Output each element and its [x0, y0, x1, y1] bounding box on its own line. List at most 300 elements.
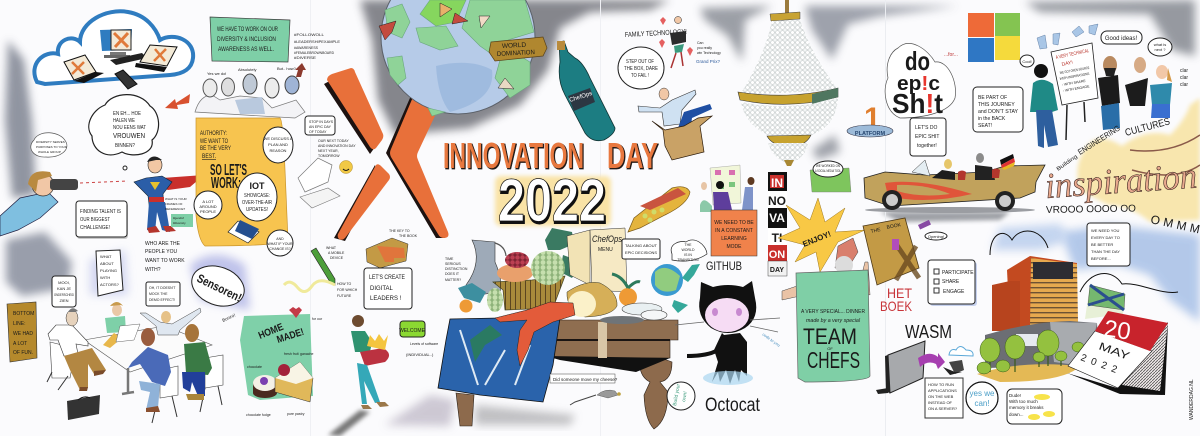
checklist box: PARTICIPATE: [942, 270, 974, 276]
title: innovation day: DAY: [608, 136, 659, 177]
flag: [1085, 284, 1125, 319]
callout: plan bubble: PLAN AND: [268, 142, 288, 147]
family technology: Grand Prix?: [696, 59, 721, 64]
do epic shit bubble: [885, 43, 958, 119]
binocular man: [0, 171, 128, 236]
the book: [863, 218, 947, 285]
octocat: [675, 281, 781, 385]
icon: keyboard: [110, 53, 147, 65]
speech bubbles: clar: [1180, 82, 1188, 88]
superman: REFERENCE?: [165, 207, 186, 211]
icon: monitor: [100, 29, 132, 58]
note: social media tool: [810, 161, 851, 192]
do epic shit bubble: do: [905, 46, 930, 76]
speech: sensoren: [186, 259, 250, 313]
speech: small right of panel: STOP IN DAYS: [309, 120, 334, 124]
family technology: win Technology: [697, 51, 721, 55]
person: left man: [48, 308, 106, 391]
hashtag list: #LEADERSHIPEXAMPLE: [294, 39, 340, 44]
note: sketches and smiley: OUR NEXT TODAY: [318, 139, 349, 143]
icon: german flag: [1000, 154, 1015, 170]
bread: [567, 282, 617, 317]
label: het boek: [880, 285, 913, 314]
text: time: DOES IT: [445, 272, 460, 276]
X logo: [324, 51, 464, 241]
man jumping from box: [638, 88, 712, 160]
small cloud: DIVERSITY SERVES: [36, 140, 65, 144]
speech: we need you: BE BETTER: [1091, 242, 1113, 247]
speech: finding talent: CHALLENGE!: [80, 225, 110, 231]
sticky board team: [700, 165, 754, 212]
chair: [152, 366, 178, 423]
speech: it doesn't work: OH, IT DOESN'T: [149, 286, 176, 290]
speech: digital leaders: LEADERS !: [370, 296, 402, 302]
note: diversity: AWARENESS AS WELL.: [218, 47, 274, 53]
speech: playing with actors: PLAYING: [100, 268, 117, 273]
panel: home made: chocolate fudge: [246, 413, 271, 417]
callout: small bubble: CHANGE IS?: [269, 247, 291, 251]
herbs: [470, 325, 502, 362]
note: how to run: INSTEAD OF: [928, 400, 953, 405]
signature: WANDERDAG.NL: [1189, 379, 1195, 420]
table legs: [456, 358, 672, 429]
note: social media tool: WE WORKED ON: [816, 163, 840, 168]
calendar: [1067, 311, 1168, 395]
speech: we need you: [1087, 223, 1130, 266]
the book: THE: [870, 227, 882, 235]
person: man green shirt: [182, 324, 212, 400]
speech: we need you: EVERY DAY TO: [1091, 235, 1120, 240]
innovation blocks: [768, 172, 787, 276]
speech: dude: [1007, 389, 1062, 424]
fruit: small orange: [460, 300, 472, 312]
map: land: [385, 0, 534, 116]
icon: flags: [379, 3, 514, 89]
panel: home made: chocolate: [247, 365, 262, 369]
innovation blocks: VA: [769, 211, 785, 225]
inspiration cloud and lettering: ENGINEERING: [1076, 124, 1122, 157]
icon: right laptop: [135, 45, 177, 72]
speech: digital leaders: LET'S CREATE: [369, 275, 405, 281]
label: het boek: HET: [887, 285, 912, 301]
innovation blocks: NO: [768, 194, 786, 208]
icon: server: [876, 341, 925, 394]
note: how to run: [925, 378, 963, 418]
speech bubbles: Good ideas!: [1105, 36, 1138, 42]
note: bottom line: LINE:: [13, 321, 26, 327]
speech: be part of this journey: THIS JOURNEY: [978, 102, 1015, 108]
callout: IoT bubble: SHOWCASE:: [244, 193, 270, 199]
speech: step out of the box: THE BOX, DARE: [624, 66, 659, 72]
callout: people bubble: AROUND: [199, 204, 217, 209]
callout: people bubble: A LOT: [202, 199, 214, 204]
speech: playing with actors: ABOUT: [100, 261, 114, 266]
driver: [932, 159, 966, 180]
person: man blue shirt: [128, 328, 171, 412]
speech bubbles: what is: [1154, 42, 1166, 47]
building: [977, 231, 1178, 382]
speech: be part of this journey: in the BACK: [978, 116, 1006, 122]
person: bearded: [1098, 56, 1120, 130]
icon: briefcase: [67, 395, 100, 420]
hashtag list: #FOLLOWOLL: [294, 32, 325, 37]
plate: world domination: [489, 37, 547, 61]
small cloud: [31, 133, 68, 157]
chef figure and starburst: [778, 198, 870, 300]
chair: [47, 342, 76, 390]
trees: [977, 330, 1084, 374]
whiteboard: - WITH ENGAGE: [1062, 84, 1090, 93]
panel: home made: ganache: [300, 352, 313, 356]
icon: phone: [115, 70, 137, 89]
checklist box: [928, 260, 977, 306]
passenger: [975, 153, 1000, 180]
panel: team of chefs: made by a very special: [806, 318, 861, 324]
hashtag list: #DIVERSE: [294, 55, 316, 60]
panel: team of chefs: OF: [827, 346, 833, 351]
calendar: 2022: [1079, 352, 1119, 376]
family technology: you really: [697, 46, 712, 50]
five portraits: Yes we do!: [207, 71, 226, 76]
speech: let's do epic shit: together!: [917, 143, 937, 149]
speech bubbles: clar: [1180, 68, 1188, 74]
table: [84, 326, 212, 372]
note: how to run: ON THE WEB: [928, 394, 954, 399]
speech: step out of the box: STEP OUT OF: [626, 59, 654, 65]
person with crown: [328, 315, 389, 436]
thought cloud: NOU EENS WAT: [113, 125, 146, 131]
platform 1: [847, 102, 893, 137]
speech: let's do epic shit: LET'S DO: [915, 125, 937, 131]
team at whiteboard: [1020, 24, 1188, 148]
cake: slice: [275, 362, 313, 402]
car with drivers: [864, 153, 1045, 213]
superman: [134, 156, 204, 233]
panel: yellow authority: WE WANT TO: [200, 139, 228, 145]
small cloud: WHOLE GROUP: [38, 150, 61, 154]
green device: [399, 321, 438, 357]
speech: be part of this journey: and DON'T STAY: [978, 109, 1019, 115]
speech: be part of this journey: [973, 87, 1023, 132]
note: constant learning mode: WE NEED TO BE: [714, 220, 754, 226]
note: constant learning mode: IN A CONSTANT: [715, 228, 753, 234]
speech: mooi: [52, 276, 76, 307]
callout: people bubble: [194, 191, 222, 219]
note: sketches and smiley: NEXT YEAR,: [318, 149, 339, 153]
note: bottom line: WE HAD: [13, 331, 33, 337]
panel: yellow authority: BEST.: [202, 154, 216, 160]
text: who are the people: WHO ARE THE: [145, 241, 181, 247]
checklist box: SHARE: [942, 279, 960, 285]
chef figure and starburst: THERE IS ONE: [810, 283, 839, 288]
panel: yellow authority: AUTHORITY:: [200, 131, 227, 137]
plate: world domination: DOMINATION: [497, 49, 535, 58]
innovation blocks: DAY: [770, 267, 784, 274]
note: bottom line: OF FUN.: [13, 350, 33, 356]
speech: finding talent: FINDING TALENT IS: [80, 209, 122, 215]
thought: world in transition: THE: [684, 243, 692, 247]
inspiration cloud and lettering: Building: [1056, 154, 1079, 173]
text: time: DISTINCTION: [445, 267, 468, 271]
note: how to run: ON A SERVER?: [928, 406, 958, 411]
text: who are the people: PEOPLE YOU: [145, 249, 178, 255]
callout: small bubble: WHAT IF YOUR: [267, 242, 293, 246]
platform 1: PLATFORM: [855, 131, 885, 137]
bottle: [557, 41, 615, 141]
note: diversity: WE HAVE TO WORK ON OUR: [217, 27, 278, 33]
box: [652, 116, 712, 160]
person: back view: [1030, 64, 1058, 148]
fruit: small grapes: [487, 288, 503, 312]
inspiration cloud and lettering: OMMM: [1149, 212, 1200, 236]
label: het boek: BOEK: [880, 298, 913, 314]
callout: people bubble: PEOPLE: [200, 209, 216, 214]
innovation blocks: TI: [772, 231, 782, 245]
speech: epic decisions: EPIC DECISIONS: [625, 250, 657, 255]
label: octocat: Octocat: [705, 395, 761, 416]
panel: home made: for our: [312, 317, 323, 321]
speech: be part of this journey: BE PART OF: [978, 95, 1007, 101]
speech: let's do epic shit: [910, 118, 946, 156]
panel: home made: pure pastry: [287, 412, 305, 416]
pencil and squiggle: WHAT: [326, 246, 337, 250]
speech: yes we can: [966, 382, 998, 414]
icon: cloud: [949, 346, 973, 356]
speech: step out of the box: [618, 47, 664, 89]
cake: brown: [253, 375, 277, 398]
panel: home made: HOME: [257, 322, 285, 342]
hashtag list: #FEMALEBROWNBOARD: [294, 50, 334, 55]
small globe: [651, 264, 700, 313]
whiteboard: [1051, 43, 1098, 140]
five portraits: Absolutely: [238, 67, 256, 72]
speech: playing with actors: WITH: [100, 275, 110, 280]
fruit: green grapes: [531, 251, 565, 285]
blue cloth: [438, 310, 560, 402]
tan box: THE KEY TO: [389, 229, 410, 233]
family technology: Can: [697, 41, 703, 45]
chef figure and starburst: MORE THING!: [810, 289, 837, 294]
pencil and squiggle: FUTURE: [337, 294, 352, 298]
calendar: 20: [1102, 315, 1132, 346]
sticky notes: [1037, 24, 1098, 49]
title: innovation day: DAY: [607, 135, 658, 176]
speech: playing with actors: ACTORS?: [100, 282, 120, 287]
whiteboard: WE GOT OPEN SOURCE: [1059, 66, 1090, 75]
label: wasm: WASM: [905, 322, 952, 342]
thought cloud: [89, 95, 159, 170]
thought: world in transition: WORLD: [681, 248, 695, 252]
callout: IoT bubble: OVER-THE-AIR: [242, 200, 272, 206]
speech: digital leaders: DIGITAL: [370, 286, 394, 292]
text: who are the people: [145, 241, 185, 273]
hashtag list: #AWARENESS: [294, 45, 318, 50]
panel: yellow authority: [194, 118, 293, 256]
speech: mooi: MOOI,: [58, 280, 70, 285]
speech: mooi: ZIEN: [59, 298, 69, 303]
innovation blocks: ON: [769, 249, 785, 261]
panel: team of chefs: A VERY SPECIAL... DINNER: [801, 309, 865, 315]
text: time: [445, 257, 468, 282]
inspiration cloud and lettering: inspiration: [1044, 155, 1198, 206]
github label: GITHUB: [706, 259, 742, 273]
do epic shit bubble: Sh!t: [892, 88, 943, 119]
family technology: FAMILY TECHNOLOGY!: [625, 29, 687, 39]
circle: build your own: [667, 382, 695, 410]
speech: playing with actors: WHAT: [100, 254, 112, 259]
tan box: [366, 229, 418, 268]
checklist box: ENGAGE: [943, 289, 965, 295]
leaf: teal: [458, 283, 486, 303]
callout: small bubble: AND: [276, 237, 284, 241]
speech: let's do epic shit: EPIC SHIT: [915, 134, 939, 140]
text: who are the people: WANT TO WORK: [145, 258, 185, 264]
table: [550, 320, 678, 358]
person: man arms up: [140, 308, 201, 335]
note: constant learning mode: MODE: [726, 244, 742, 250]
title: 2022: 2022: [499, 169, 607, 236]
whiteboard: WITH INSPIRATIONS: [1059, 72, 1090, 81]
speech: small right of panel: OF TODAY: [309, 130, 327, 134]
the book: BOOK: [886, 222, 902, 231]
panel: home made: fresh fruit: [284, 352, 299, 356]
icon: left laptop: [64, 55, 104, 83]
panel: yellow authority: WORK:: [211, 175, 241, 192]
text: time: SERIOUS: [445, 262, 461, 266]
speech bubbles: next ?: [1155, 47, 1166, 52]
pencil and squiggle: HOW TO: [337, 282, 352, 286]
speech: it doesn't work: [146, 282, 180, 306]
speech: dude: memory it breaks: [1009, 405, 1044, 410]
menu: [567, 228, 627, 292]
panel: team of chefs: TEAM: [803, 324, 857, 349]
fruit: basket: [497, 252, 533, 282]
panel: home made: MADE!: [276, 327, 306, 346]
note: bottom line: [7, 302, 37, 362]
callout: plan bubble: REASON: [270, 148, 287, 153]
speech: finding talent: [76, 201, 128, 239]
inspiration cloud and lettering: [1044, 98, 1200, 236]
microsoft logo: [968, 13, 1020, 62]
superman: #diversity: [173, 221, 186, 225]
callout: plan bubble: WE DISCUSS A: [264, 136, 293, 141]
pencil and squiggle: DEVICE: [330, 256, 344, 260]
text: time: MATTER?: [445, 278, 461, 282]
jug: [466, 240, 501, 296]
whiteboard: - WITH SHARE: [1061, 79, 1087, 87]
chandelier: [738, 0, 838, 166]
callout: IoT bubble: UPDATES!: [246, 207, 268, 213]
panel: home made: [240, 307, 323, 417]
thought cloud: HALEN WE: [113, 118, 136, 124]
speech: we need you: WE NEED YOU: [1091, 228, 1119, 233]
superman: FRAMES OF: [165, 202, 183, 206]
leaves: [545, 228, 574, 250]
five portraits: But.. how?: [277, 66, 297, 71]
note: bottom line: BOTTOM: [13, 311, 34, 317]
speech: step out of the box: TO FAIL !: [631, 73, 649, 79]
thought: world in transition: [671, 240, 707, 262]
still life table: [438, 228, 678, 429]
note: social media tool: A SOCIAL MEDIA TOOL: [815, 168, 841, 173]
note: diversity: [210, 17, 290, 62]
circle: build your own: Build your: [672, 383, 682, 406]
mouse: [570, 390, 621, 405]
speech bubbles: [1020, 31, 1188, 88]
speech: cheese: [550, 374, 618, 383]
speech: it doesn't work: DEMO EFFECT!: [149, 298, 175, 302]
cloud with devices: [34, 11, 193, 89]
inspiration cloud and lettering: VROOO OOOO OO: [1046, 203, 1136, 216]
note: diversity: DIVERSITY & INCLUSION: [217, 37, 276, 43]
table scene: [47, 302, 236, 423]
thought: world in transition: TRANSITION: [677, 258, 699, 262]
note: constant learning mode: [711, 210, 757, 256]
speech: playing with actors: [96, 250, 123, 296]
menu: MENU: [598, 247, 613, 253]
line clouds: [990, 231, 1178, 292]
person: woman: [1150, 65, 1172, 118]
thought cloud: BINNEN?: [115, 143, 135, 149]
text: who are the people: WITH?: [145, 267, 161, 273]
speech: epic decisions: [622, 239, 660, 259]
innovation blocks: IN: [771, 176, 783, 190]
title: innovation day: INNOVATION: [443, 135, 584, 176]
note: constant learning mode: LEARNING: [721, 236, 747, 242]
speech: digital leaders: [364, 268, 412, 309]
five portraits: [195, 66, 305, 118]
speech: cheese: Did someone move my cheese?: [553, 377, 618, 382]
note: sketches and smiley: TOMORROW: [318, 154, 340, 158]
do epic shit bubble: ep!c: [897, 73, 940, 95]
speech: we need you: THAN THE DAY: [1091, 249, 1120, 254]
panel: yellow authority: SO LET'S: [210, 162, 247, 179]
menu: ChefOps: [592, 234, 622, 244]
icon: laptop: [228, 220, 259, 243]
arrow: up to hashtags: [295, 63, 306, 77]
family technology: [625, 16, 721, 68]
speech: yes we can: can!: [974, 399, 990, 408]
callout: plan bubble: [263, 127, 293, 163]
title: 2022: 2022: [498, 167, 606, 234]
basket: [493, 276, 565, 310]
speech bubbles: clar: [1180, 75, 1188, 81]
speech: mooi: ONDERSCHEID: [54, 292, 74, 297]
inspiration cloud and lettering: CULTURES: [1124, 116, 1171, 139]
circle: build your own: own!: [681, 391, 689, 402]
note: bottom line: A LOT: [13, 341, 27, 347]
callout: IoT bubble: [237, 173, 277, 221]
thought: world in transition: IS IN: [684, 253, 692, 257]
hashtag list: [294, 32, 340, 60]
table scene: Bonzo!: [221, 312, 236, 323]
arrow: red towards thought: [165, 94, 190, 109]
person: glasses: [1125, 57, 1148, 106]
the book: Opening!: [928, 234, 944, 239]
lobster: [495, 302, 575, 366]
speech: mooi: KAN JE: [57, 286, 71, 291]
speech: dude: With too much: [1009, 399, 1038, 404]
speech: epic decisions: TALKING ABOUT: [625, 243, 658, 248]
note: sketches and smiley: [298, 139, 356, 208]
callout: IoT bubble: IOT: [250, 181, 265, 191]
platform 1: 1: [864, 102, 881, 135]
plate: world domination: WORLD: [502, 42, 527, 50]
pencil and squiggle: [284, 246, 358, 298]
icon: laptop: [943, 360, 964, 375]
chair: [200, 355, 223, 412]
speech: finding talent: OUR BIGGEST: [80, 217, 110, 223]
